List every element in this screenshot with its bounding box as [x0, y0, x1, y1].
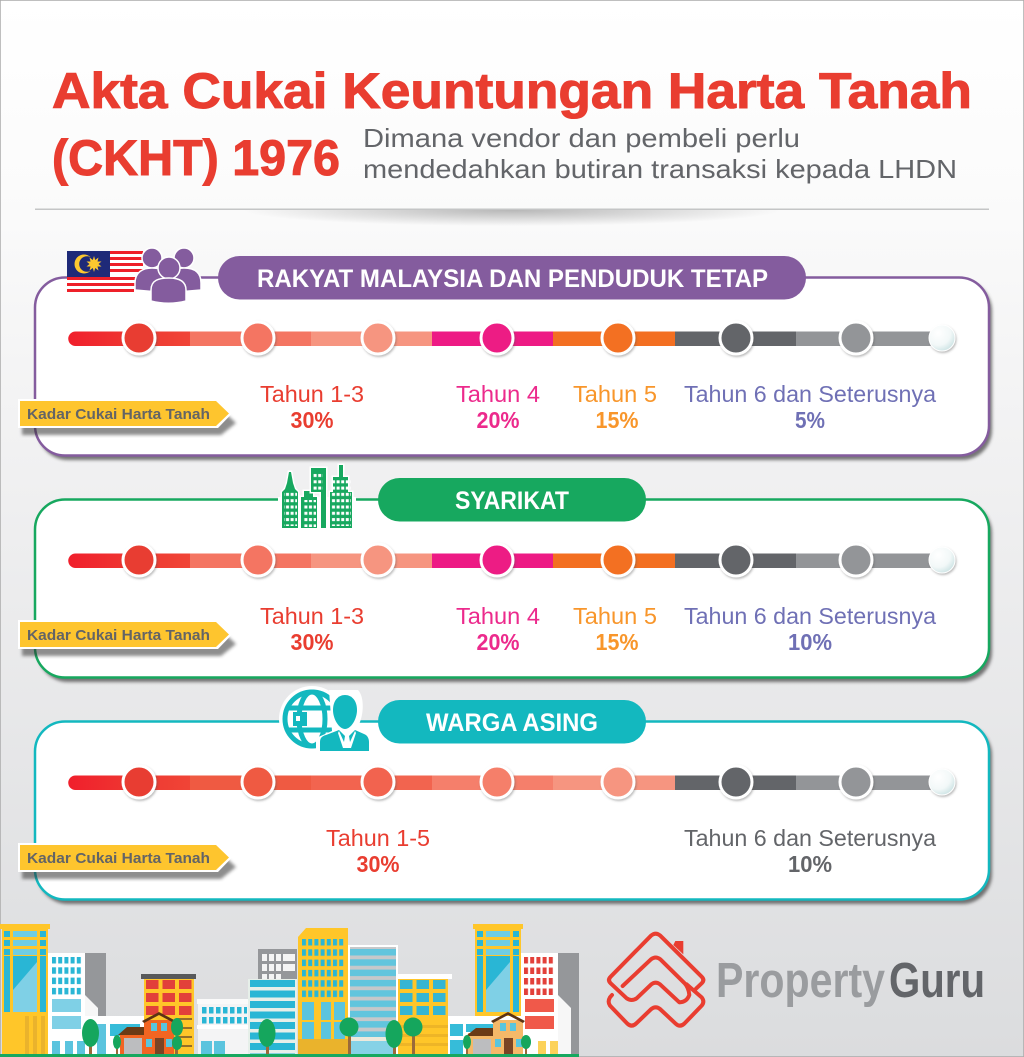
icon: people group	[135, 248, 201, 303]
subtitle	[363, 123, 957, 184]
heading pill: SYARIKAT	[455, 487, 569, 515]
icon: office buildings	[277, 462, 357, 532]
white building with red windows	[521, 953, 571, 1054]
illustration: city skyline	[0, 924, 579, 1057]
logo wordmark: Property	[716, 954, 885, 1008]
teal striped building	[248, 979, 297, 1054]
logo: propertyguru: Guru	[889, 954, 985, 1008]
title: (CKHT) 1976	[52, 130, 340, 186]
year labels: 10%	[788, 629, 832, 655]
tall yellow building	[298, 928, 348, 1054]
year labels	[260, 603, 936, 655]
tag: kadar cukai	[18, 843, 236, 879]
timeline track	[68, 766, 955, 798]
header divider	[35, 208, 989, 224]
heading pill: WARGA ASING	[426, 709, 598, 737]
silver glass building	[348, 945, 398, 1054]
year labels: Tahun 1-5	[326, 825, 430, 851]
year labels: 20%	[476, 629, 520, 655]
white low building	[197, 999, 248, 1054]
heading pill	[355, 478, 646, 522]
year labels: 20%	[476, 407, 520, 433]
panel: warga asing	[18, 686, 992, 904]
year labels	[260, 381, 936, 433]
year labels: 30%	[356, 851, 400, 877]
year labels	[326, 825, 936, 877]
yellow building with red windows	[141, 974, 196, 1054]
white building left	[48, 953, 145, 1054]
logo mark	[609, 934, 703, 1026]
year labels: Tahun 4	[456, 603, 540, 629]
tag: kadar cukai	[18, 399, 236, 435]
year labels: Tahun 6 dan Seterusnya	[684, 825, 936, 851]
timeline track	[68, 322, 955, 354]
year labels: 5%	[795, 407, 825, 433]
grey backdrop towers	[85, 949, 579, 1054]
icon: malaysian flag	[67, 251, 143, 293]
year labels: Tahun 6 dan Seterusnya	[684, 381, 936, 407]
subtitle: mendedahkan butiran transaksi kepada LHDN	[363, 154, 957, 184]
year labels: 10%	[788, 851, 832, 877]
year labels: Tahun 1-3	[260, 603, 364, 629]
trees	[82, 1018, 531, 1054]
heading pill	[200, 256, 806, 300]
tag: kadar cukai: Kadar Cukai Harta Tanah	[27, 406, 210, 423]
panel: rakyat malaysia	[18, 248, 992, 460]
subtitle: Dimana vendor dan pembeli perlu	[363, 123, 800, 153]
year labels: 30%	[290, 629, 334, 655]
year labels: 30%	[290, 407, 334, 433]
icon: globe and businessman	[279, 686, 372, 753]
year labels: Tahun 5	[573, 603, 657, 629]
ground strip	[0, 1054, 579, 1057]
year labels: 15%	[596, 629, 638, 655]
heading pill	[355, 700, 646, 744]
year labels: Tahun 5	[573, 381, 657, 407]
yellow glass tower left	[0, 924, 50, 1054]
timeline track	[68, 544, 955, 576]
tag: kadar cukai: Kadar Cukai Harta Tanah	[27, 627, 210, 644]
heading pill: RAKYAT MALAYSIA DAN PENDUDUK TETAP	[257, 265, 768, 293]
title: Akta Cukai Keuntungan Harta Tanah	[52, 63, 972, 119]
year labels: Tahun 1-3	[260, 381, 364, 407]
panel: syarikat	[18, 462, 992, 682]
tag: kadar cukai	[18, 620, 236, 656]
year labels: Tahun 6 dan Seterusnya	[684, 603, 936, 629]
logo: propertyguru	[609, 934, 985, 1026]
yellow glass tower right	[448, 924, 523, 1054]
year labels: Tahun 4	[456, 381, 540, 407]
tan house	[466, 1012, 525, 1054]
tag: kadar cukai: Kadar Cukai Harta Tanah	[27, 850, 210, 867]
orange house	[118, 1012, 176, 1054]
small yellow building	[398, 974, 452, 1054]
year labels: 15%	[596, 407, 638, 433]
title	[52, 63, 972, 186]
